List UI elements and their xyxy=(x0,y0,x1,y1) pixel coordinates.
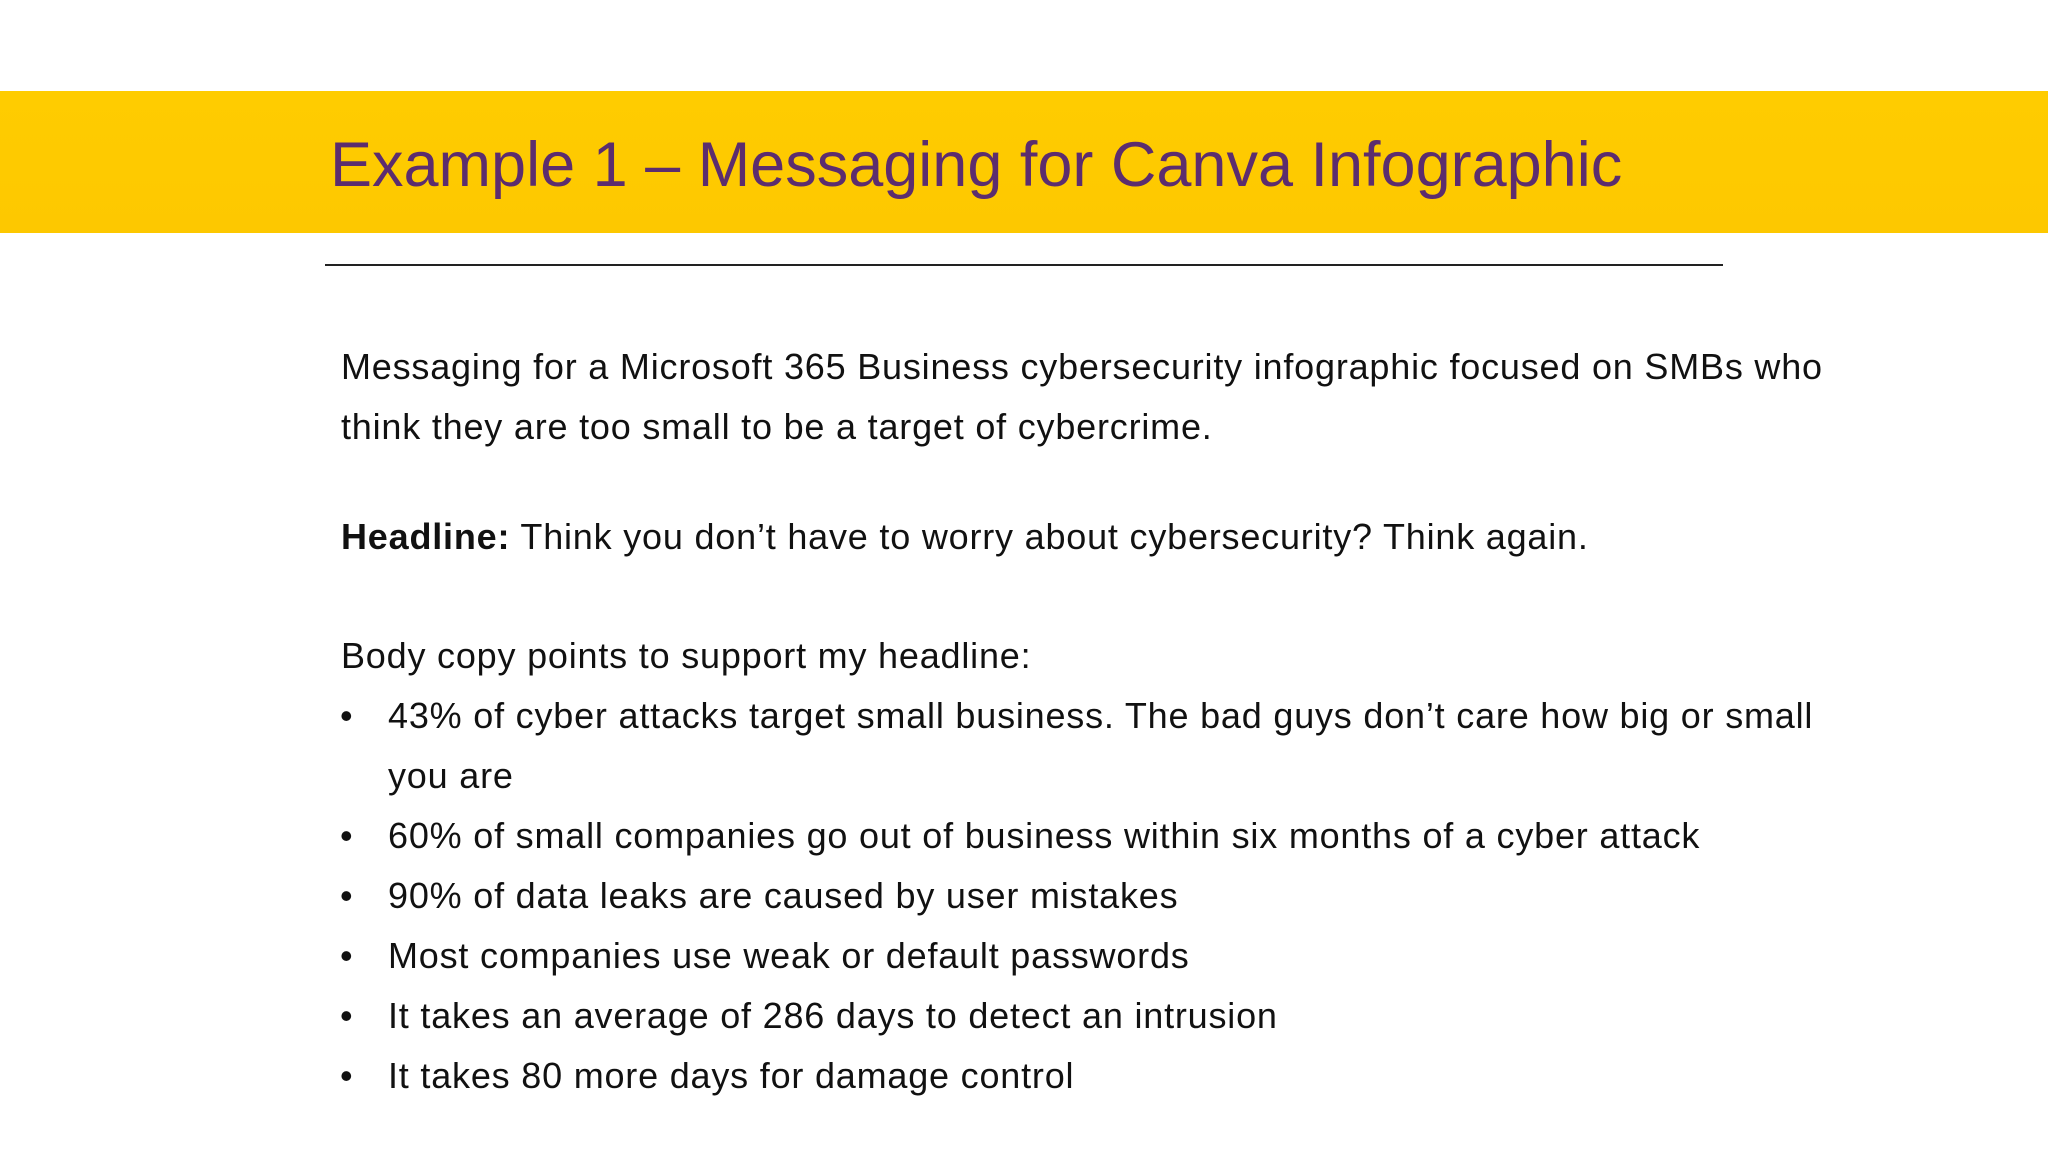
bullet list: Most companies use weak or default passwords xyxy=(388,935,1190,976)
body text block: think they are too small to be a target of cybercrime. xyxy=(341,406,1213,447)
bullet list: 43% of cyber attacks target small business. The bad guys don’t care how big or small xyxy=(388,695,1813,736)
bullet list: • xyxy=(340,995,353,1036)
bullet list: • xyxy=(340,1055,353,1096)
bullet list: • xyxy=(340,695,353,736)
bullet list: you are xyxy=(388,755,514,796)
bullet list: 60% of small companies go out of business within six months of a cyber attack xyxy=(388,815,1700,856)
bullet list: • xyxy=(340,875,353,916)
bullet list: • xyxy=(340,935,353,976)
intro paragraph: Messaging for a Microsoft 365 Business cybersecurity infographic focused on SMBs who xyxy=(341,346,1823,387)
yellow title band xyxy=(0,91,2048,233)
headline line: Headline: Think you don’t have to worry about cybersecurity? Think again. xyxy=(341,516,1589,557)
body copy intro: Body copy points to support my headline: xyxy=(341,635,1031,676)
title: Example 1 – Messaging for Canva Infographic xyxy=(330,130,1622,200)
bullet list: It takes an average of 286 days to detect an intrusion xyxy=(388,995,1278,1036)
bullet list: 90% of data leaks are caused by user mistakes xyxy=(388,875,1178,916)
bullet list: It takes 80 more days for damage control xyxy=(388,1055,1074,1096)
bullet list: • xyxy=(340,815,353,856)
bullet list xyxy=(340,695,1813,1096)
